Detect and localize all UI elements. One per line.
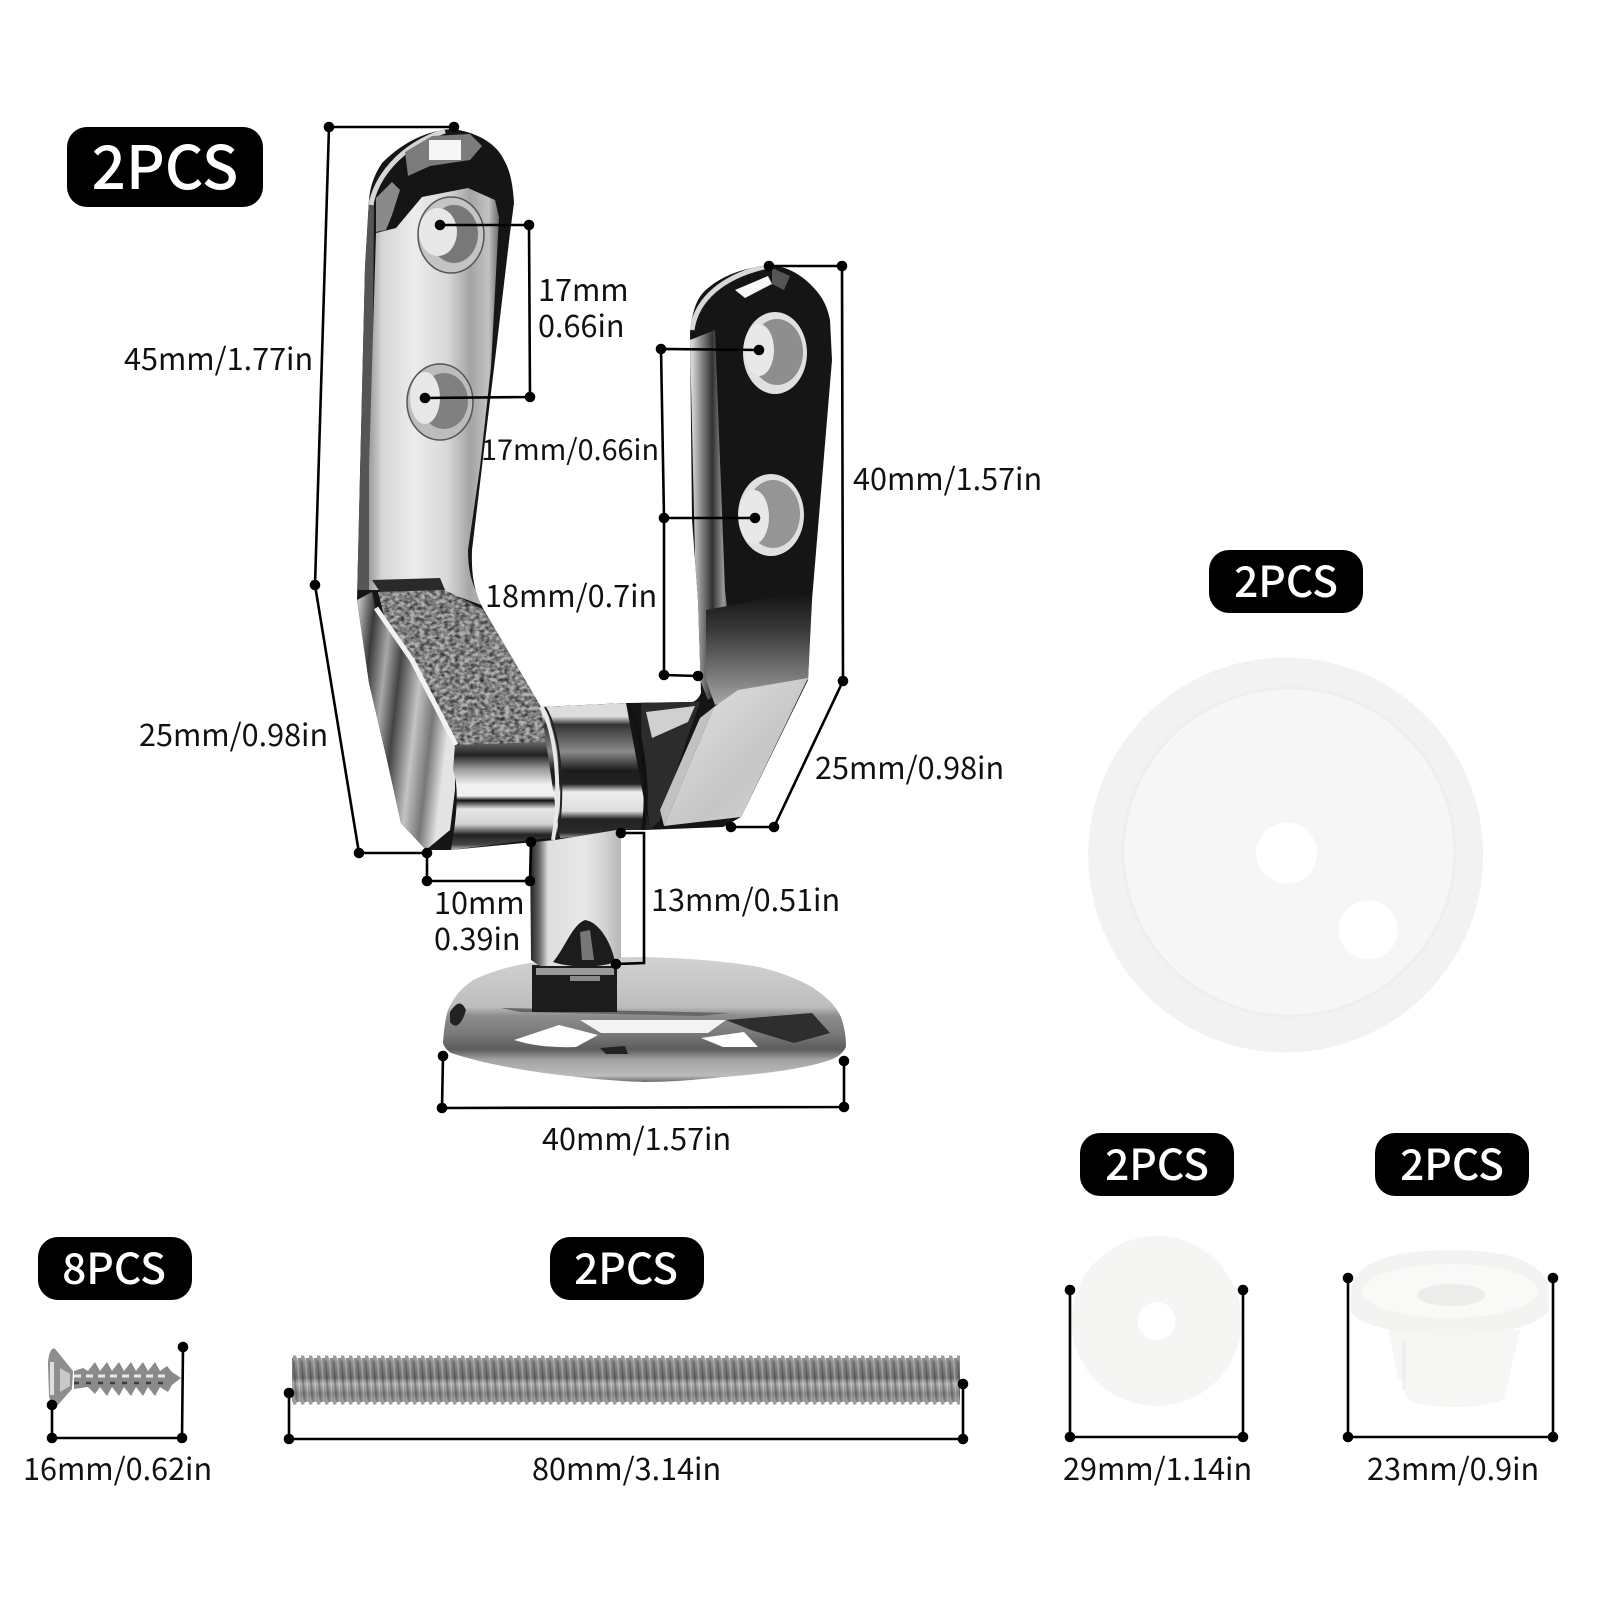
label: 25mm/0.98in left: 25mm/0.98in	[139, 711, 328, 755]
hinge post lower collar	[532, 965, 617, 1012]
dimension: 80mm rod	[284, 1379, 968, 1444]
label: 40mm/1.57in right: 40mm/1.57in	[853, 455, 1042, 499]
badge: 2PCS rod: 2PCS	[574, 1236, 678, 1297]
hinge arm silhouette	[357, 129, 832, 850]
hinge post	[530, 830, 621, 966]
dimension: 25mm lower right	[726, 681, 843, 832]
label: 80mm/3.14in: 80mm/3.14in	[532, 1445, 721, 1489]
hinge: chrome U bracket with post and base	[357, 129, 846, 1082]
threaded rod	[292, 1358, 960, 1402]
screw	[48, 1348, 181, 1407]
label: 23mm/0.9in: 23mm/0.9in	[1367, 1445, 1539, 1489]
label: 16mm/0.62in: 16mm/0.62in	[23, 1445, 212, 1489]
label: 18mm/0.7in: 18mm/0.7in	[485, 572, 657, 616]
dimension: 13mm post	[611, 828, 644, 969]
badge: 2PCS nut	[1375, 1132, 1529, 1196]
dimension: 17mm left holes	[420, 220, 535, 403]
badge: 2PCS disc	[1209, 549, 1363, 613]
label: 17mm 0.66in: 0.66in	[538, 302, 625, 346]
badge: 8PCS screw: 8PCS	[62, 1236, 166, 1297]
label: 13mm/0.51in: 13mm/0.51in	[651, 876, 840, 920]
badge: 2PCS nut: 2PCS	[1400, 1132, 1504, 1193]
dimension: 40mm right arm	[764, 261, 848, 686]
badge: 8PCS screw	[38, 1236, 192, 1300]
label: 45mm/1.77in: 45mm/1.77in	[124, 335, 313, 379]
label: 40mm/1.57in base: 40mm/1.57in	[542, 1115, 731, 1159]
label: 17mm/0.66in: 17mm/0.66in	[481, 428, 659, 469]
plastic nut	[1351, 1250, 1549, 1407]
label: 17mm 0.66in: 17mm	[538, 266, 629, 310]
mounting hole: lower left	[407, 364, 473, 440]
label: 25mm/0.98in right: 25mm/0.98in	[815, 744, 1004, 788]
label: 10mm 0.39in: 0.39in	[434, 915, 521, 959]
badge: 2PCS hinge: 2PCS	[92, 120, 238, 207]
dimension: 25mm lower left	[315, 585, 432, 858]
large plastic disc	[1088, 658, 1483, 1052]
label: 29mm/1.14in: 29mm/1.14in	[1063, 1445, 1252, 1489]
small washer	[1072, 1236, 1242, 1406]
badge: 2PCS washer: 2PCS	[1105, 1132, 1209, 1193]
dimension: 18mm right arm	[659, 518, 703, 681]
dimension: 17mm right holes	[656, 344, 764, 523]
dimension: 23mm nut	[1343, 1273, 1558, 1442]
dimension: 16mm screw	[47, 1342, 188, 1443]
mounting hole: lower right	[738, 474, 804, 556]
badge: 2PCS rod	[550, 1236, 704, 1300]
badge: 2PCS disc: 2PCS	[1234, 549, 1338, 610]
dimension: 29mm washer	[1065, 1285, 1248, 1442]
left arm chrome surfaces	[357, 131, 714, 850]
dimension: 45mm arm height	[310, 122, 459, 590]
hinge base plate	[443, 957, 846, 1082]
dimension: 10mm barrel	[422, 837, 536, 886]
mounting hole: upper right	[743, 312, 807, 394]
right arm chrome surfaces	[664, 266, 812, 826]
dimension: 40mm base	[437, 1051, 849, 1113]
label: 10mm 0.39in: 10mm	[434, 879, 525, 923]
badge: 2PCS washer	[1080, 1132, 1234, 1196]
mounting hole: upper left	[418, 197, 484, 273]
